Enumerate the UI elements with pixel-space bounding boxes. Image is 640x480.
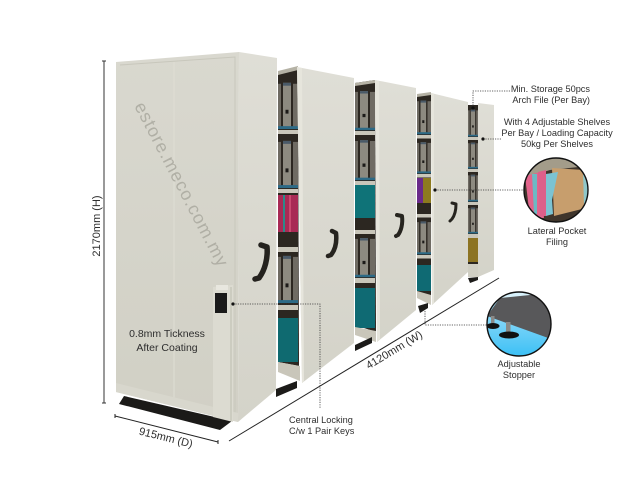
icon: filing circle	[524, 158, 588, 222]
bay 1 cabinet	[116, 52, 277, 422]
callout: minimum storage: Min. Storage 50pcs	[511, 84, 590, 94]
callout: adjustable stopper	[425, 292, 551, 380]
callout: adjustable shelves: 50kg Per Shelves	[521, 139, 593, 149]
callout: minimum storage	[471, 84, 590, 110]
callout: minimum storage: Arch File (Per Bay)	[512, 95, 590, 105]
callout: central locking: C/w 1 Pair Keys	[289, 426, 355, 436]
callout: lateral pocket filing: Filing	[546, 237, 568, 247]
callout: adjustable shelves: With 4 Adjustable Shelves	[504, 117, 611, 127]
callout: adjustable stopper: Adjustable	[498, 359, 540, 369]
dimension: width	[229, 278, 499, 441]
dimension: height: 2170mm (H)	[91, 195, 103, 257]
bay 5 cabinet	[467, 103, 494, 277]
callout: central locking: Central Locking	[289, 415, 353, 425]
bay 4 handle	[450, 203, 456, 221]
callout: lateral pocket filing: Lateral Pocket	[528, 226, 587, 236]
central lock panel	[213, 285, 233, 422]
callout: lateral pocket filing	[433, 158, 588, 247]
text: coating thickness	[129, 328, 205, 354]
dimension: depth	[115, 414, 218, 451]
bay 2 cabinet	[277, 66, 354, 383]
callout: adjustable shelves	[481, 117, 613, 149]
bay 4 cabinet	[416, 92, 468, 305]
callout: adjustable stopper: Stopper	[503, 370, 535, 380]
callout: adjustable shelves: Per Bay / Loading Capacity	[501, 128, 613, 138]
base rail	[119, 396, 232, 430]
dimension: width: 4120mm (W)	[364, 329, 425, 372]
floor rails	[276, 277, 478, 397]
bay 2 handle	[328, 231, 336, 256]
bay 1 handle	[255, 245, 267, 279]
watermark: estore.meco.com.my	[130, 99, 233, 270]
icon: stopper circle	[486, 292, 551, 356]
dimension: depth: 915mm (D)	[138, 426, 194, 451]
text: coating thickness: 0.8mm Tickness	[129, 328, 205, 340]
bay 3 handle	[396, 215, 402, 236]
text: coating thickness: After Coating	[136, 342, 198, 354]
callout: central locking	[231, 302, 355, 436]
bay 3 cabinet	[354, 80, 416, 342]
